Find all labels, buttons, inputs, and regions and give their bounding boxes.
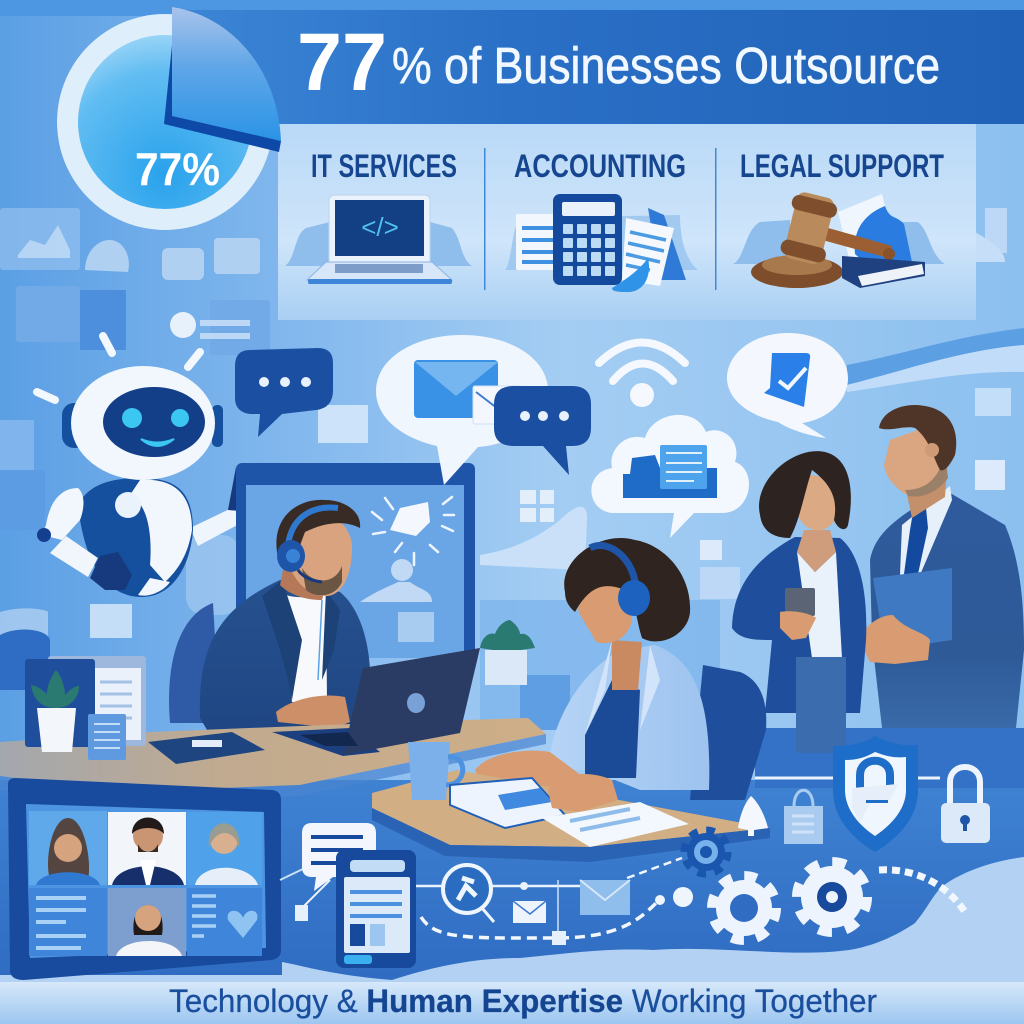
person: man with tablet bbox=[859, 405, 1024, 728]
desk: left bbox=[0, 718, 546, 808]
notebook bbox=[148, 732, 265, 764]
heading: accounting: ACCOUNTING bbox=[514, 148, 686, 184]
header band bbox=[172, 10, 1024, 124]
speech bubble: dark chat bbox=[494, 386, 591, 475]
icon: laptop bbox=[285, 195, 472, 284]
icon: magnifier circle bbox=[443, 865, 494, 922]
icon: envelope small bbox=[513, 901, 546, 923]
panel: services bbox=[278, 124, 976, 320]
icon: smartphone bbox=[336, 850, 416, 968]
icon: cog blue bbox=[685, 831, 727, 873]
title bbox=[297, 17, 940, 108]
person: woman with headset bbox=[475, 538, 766, 800]
info card left bbox=[29, 888, 107, 956]
icon: padlock bbox=[941, 767, 990, 843]
video call tablet bbox=[8, 778, 281, 980]
document box bbox=[88, 714, 126, 760]
small envelope bbox=[473, 386, 522, 424]
person: male agent with headset bbox=[169, 500, 370, 735]
participant: woman bbox=[29, 811, 107, 885]
icon: gear white right bbox=[798, 863, 866, 931]
robot head bbox=[62, 403, 87, 448]
icon: wifi bbox=[599, 342, 685, 407]
torn wave footer area bbox=[0, 857, 1024, 1024]
signal rays bbox=[37, 336, 200, 400]
icon: shield with lock bbox=[833, 736, 918, 852]
heading: legal support: LEGAL SUPPORT bbox=[740, 148, 944, 184]
speech bubble: email bbox=[376, 335, 548, 485]
wedge bbox=[172, 7, 281, 141]
icon: shopping bag bbox=[784, 790, 823, 844]
title: 77 bbox=[297, 17, 387, 108]
title: % of Businesses Outsource bbox=[392, 37, 940, 94]
lower right connector bbox=[755, 776, 940, 780]
lower background band bbox=[0, 728, 1024, 980]
laptop on desk bbox=[272, 648, 480, 756]
coffee mug bbox=[408, 742, 463, 800]
document sheet bbox=[542, 802, 689, 847]
icon: gear white left bbox=[713, 877, 775, 939]
chair bbox=[169, 603, 220, 723]
robot body bbox=[78, 478, 193, 597]
connector dots bbox=[655, 887, 693, 907]
heading: IT services: IT SERVICES bbox=[311, 148, 457, 184]
open book bbox=[450, 778, 565, 828]
icon: potted plant bbox=[31, 670, 79, 752]
speech bubble: document note bbox=[302, 823, 376, 891]
pie chart bbox=[57, 7, 281, 230]
desk: right bbox=[372, 742, 770, 862]
chair bbox=[690, 665, 766, 800]
background decorative shapes bbox=[0, 0, 1024, 730]
icon: gavel and book bbox=[733, 190, 945, 288]
icon: laptop: </> bbox=[361, 212, 399, 242]
left shelf, plant and files bbox=[25, 656, 146, 760]
robot right hand bbox=[228, 467, 272, 511]
icon: cloud bell bbox=[738, 796, 768, 836]
workflow connectors bbox=[280, 858, 967, 945]
icon: calculator and documents bbox=[505, 194, 698, 292]
participant: man bbox=[108, 812, 186, 885]
woman's hand on book bbox=[548, 774, 618, 812]
participant: young woman bbox=[108, 888, 186, 956]
small plant behind desk bbox=[480, 620, 535, 685]
person: woman with phone bbox=[732, 451, 866, 753]
info card right bbox=[187, 888, 262, 956]
icon: robot assistant bbox=[37, 336, 272, 597]
robot right arm bbox=[190, 506, 243, 546]
robot left hand bbox=[90, 552, 132, 590]
pie label: 77% bbox=[135, 143, 220, 195]
speech bubble: robot chat bbox=[235, 348, 333, 437]
speech bubble: check bbox=[727, 333, 848, 438]
icon: envelope large bbox=[580, 880, 630, 915]
participant: older woman bbox=[187, 812, 262, 885]
icon: cloud with folder bbox=[591, 415, 749, 538]
tagline: Technology & Human Expertise Working Together bbox=[169, 983, 877, 1019]
monitor behind agent bbox=[236, 463, 475, 658]
